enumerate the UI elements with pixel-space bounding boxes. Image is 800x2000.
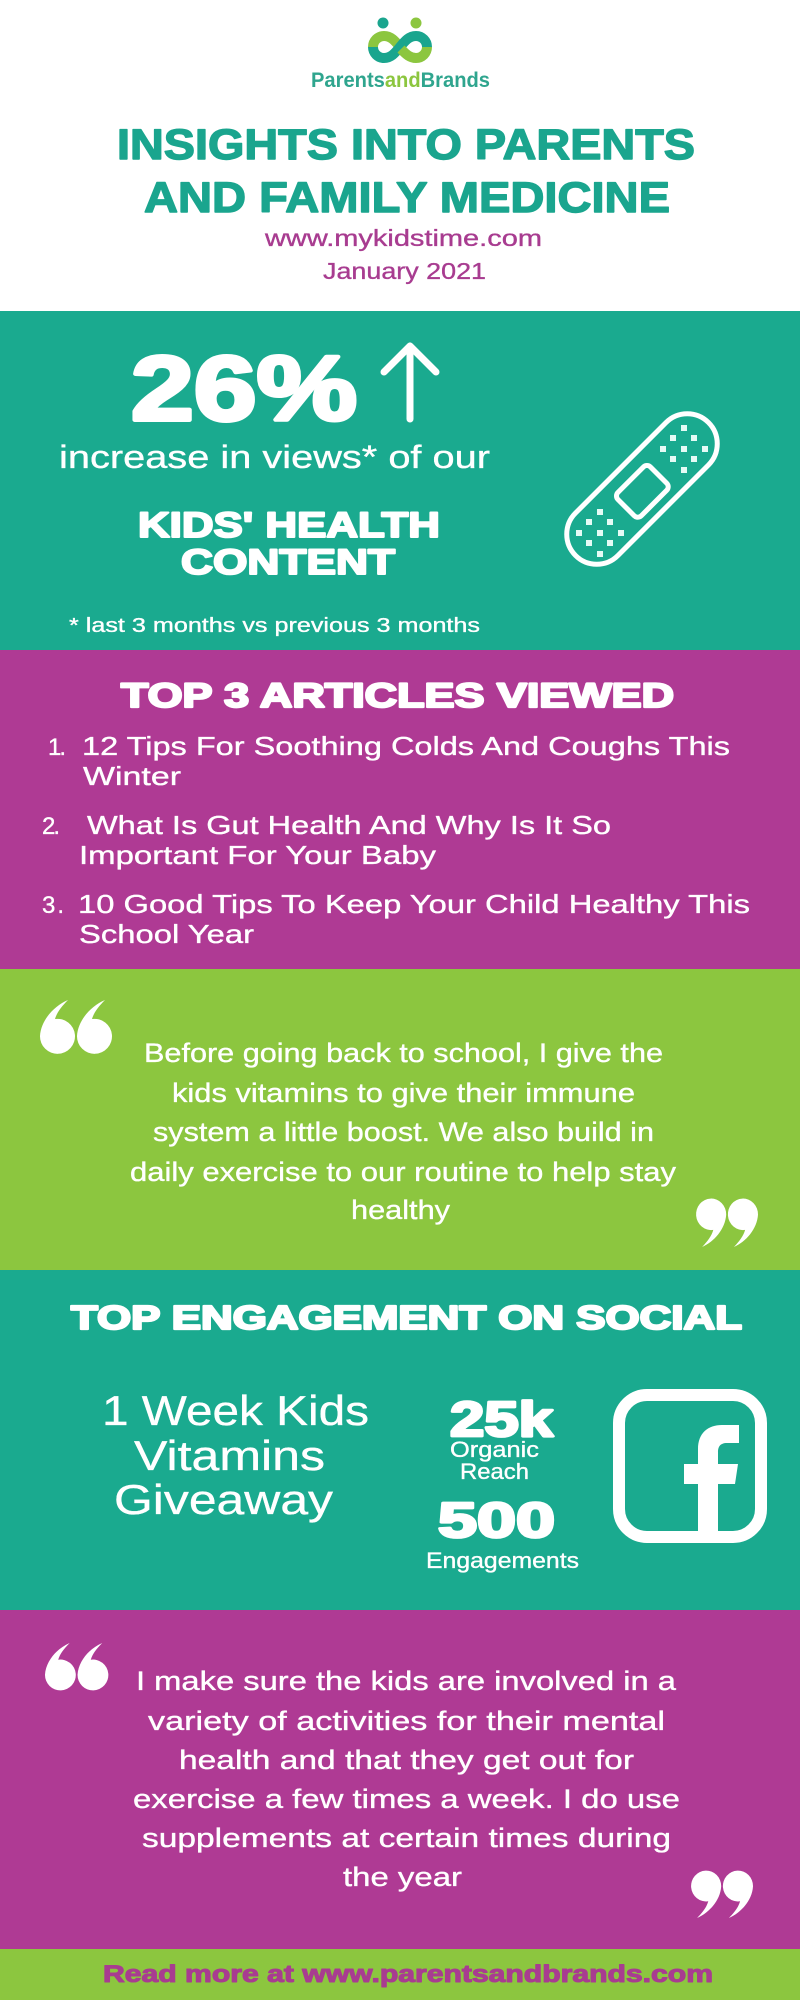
article list: Winter bbox=[83, 761, 181, 791]
stat: engagements bbox=[426, 1494, 579, 1573]
campaign name: Vitamins bbox=[134, 1432, 325, 1479]
quote text: system a little boost. We also build in bbox=[153, 1117, 654, 1147]
title: AND FAMILY MEDICINE bbox=[144, 174, 670, 222]
footer link text: Read more at www.parentsandbrands.com bbox=[103, 1961, 713, 1988]
heading: TOP 3 ARTICLES VIEWED bbox=[121, 677, 674, 715]
icon: bandage bbox=[554, 401, 730, 577]
article list: 1. bbox=[48, 734, 66, 761]
article list: 10 Good Tips To Keep Your Child Healthy This bbox=[78, 889, 750, 919]
panel: 26 percent increase bbox=[0, 311, 800, 650]
article list: School Year bbox=[79, 919, 254, 949]
kids health content heading: CONTENT bbox=[181, 543, 395, 582]
panel: footer call to action bbox=[0, 1949, 800, 2000]
logo: Parents and Brands bbox=[311, 18, 490, 92]
heading: TOP ENGAGEMENT ON SOCIAL bbox=[71, 1299, 742, 1336]
article list: What Is Gut Health And Why Is It So bbox=[87, 810, 611, 840]
icon: infinity with two figures bbox=[373, 18, 427, 58]
campaign name bbox=[102, 1387, 369, 1523]
icon: opening quote bbox=[40, 1000, 112, 1054]
icon: closing quote bbox=[691, 1871, 753, 1918]
quote text bbox=[130, 1038, 677, 1225]
quote text: Before going back to school, I give the bbox=[144, 1038, 663, 1068]
subtitle: website and date: January 2021 bbox=[323, 258, 486, 284]
stat description: increase in views* of our bbox=[59, 439, 490, 475]
icon: facebook bbox=[619, 1395, 761, 1537]
stat: organic reach: 25k bbox=[450, 1393, 554, 1447]
title: INSIGHTS INTO PARENTS bbox=[117, 121, 695, 169]
stat: organic reach: Reach bbox=[460, 1459, 529, 1484]
icon: up arrow bbox=[384, 346, 436, 419]
quote text: I make sure the kids are involved in a bbox=[136, 1666, 677, 1696]
campaign name: Giveaway bbox=[114, 1476, 333, 1523]
panel: parent quote on activities bbox=[0, 1610, 800, 1949]
article list: 3. bbox=[42, 892, 64, 919]
kids health content heading: KIDS' HEALTH bbox=[138, 506, 440, 545]
subtitle: website and date: www.mykidstime.com bbox=[264, 225, 542, 251]
stat: engagements: 500 bbox=[438, 1494, 555, 1548]
icon: closing quote bbox=[696, 1199, 758, 1247]
kids health content heading bbox=[138, 506, 440, 582]
quote text: health and that they get out for bbox=[179, 1745, 634, 1775]
article list: 12 Tips For Soothing Colds And Coughs This bbox=[82, 731, 730, 761]
quote text bbox=[133, 1666, 680, 1892]
article list bbox=[42, 731, 750, 949]
quote text: daily exercise to our routine to help stay bbox=[130, 1157, 677, 1187]
title bbox=[117, 121, 695, 222]
subtitle: website and date bbox=[264, 225, 542, 284]
quote text: exercise a few times a week. I do use bbox=[133, 1784, 680, 1814]
stat: organic reach: Organic bbox=[450, 1437, 539, 1462]
panel: parent quote on vitamins bbox=[0, 969, 800, 1270]
quote text: healthy bbox=[351, 1195, 451, 1225]
stat: organic reach bbox=[450, 1393, 554, 1484]
big stat: 26% bbox=[131, 338, 357, 440]
article list: Important For Your Baby bbox=[79, 840, 436, 870]
icon: opening quote bbox=[45, 1643, 108, 1690]
footnote: * last 3 months vs previous 3 months bbox=[69, 615, 480, 637]
quote text: the year bbox=[343, 1862, 462, 1892]
panel: top engagement on social bbox=[0, 1270, 800, 1610]
stat: engagements: Engagements bbox=[426, 1548, 579, 1573]
logo wordmark: ParentsandBrands bbox=[311, 69, 490, 92]
campaign name: 1 Week Kids bbox=[102, 1387, 369, 1434]
panel: top 3 articles bbox=[0, 650, 800, 969]
quote text: variety of activities for their mental bbox=[148, 1706, 665, 1736]
panel: header bbox=[0, 0, 800, 311]
article list: 2. bbox=[42, 813, 60, 840]
quote text: supplements at certain times during bbox=[142, 1823, 671, 1853]
quote text: kids vitamins to give their immune bbox=[172, 1078, 635, 1108]
